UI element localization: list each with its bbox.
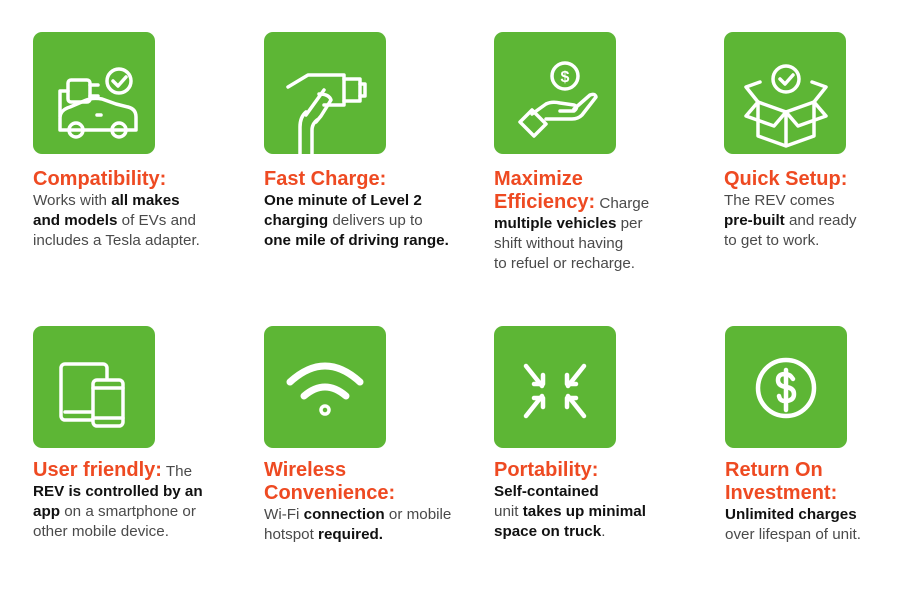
icon: wifi xyxy=(264,326,386,448)
text: fast charge: One minute of Level 2 xyxy=(264,192,422,209)
text: wireless convenience: Wireless xyxy=(264,459,346,481)
text: portability xyxy=(494,459,646,540)
text: maximize efficiency xyxy=(494,168,649,272)
text: quick setup: pre-built and ready xyxy=(724,212,857,229)
text: compatibility: Compatibility: xyxy=(33,168,166,190)
text: maximize efficiency: multiple vehicles per xyxy=(494,215,643,232)
text: user friendly: other mobile device. xyxy=(33,523,169,540)
icon: box with check xyxy=(724,32,846,154)
text: return on investment: Unlimited charges xyxy=(725,506,857,523)
icon: hand with coin xyxy=(494,32,616,154)
text: quick setup xyxy=(724,168,857,249)
text: wireless convenience xyxy=(264,459,451,543)
text: fast charge: one mile of driving range. xyxy=(264,232,449,249)
icon: car with plug xyxy=(33,32,155,154)
text: quick setup: The REV comes xyxy=(724,192,835,209)
text: user friendly xyxy=(33,459,203,540)
text: return on investment: over lifespan of unit. xyxy=(725,526,861,543)
text: portability: unit takes up minimal xyxy=(494,503,646,520)
icon: tablet and phone xyxy=(33,326,155,448)
text: user friendly: User friendly: The xyxy=(33,459,192,481)
icon: hand with coin: $ xyxy=(561,69,570,86)
text: compatibility: and models of EVs and xyxy=(33,212,196,229)
text: return on investment xyxy=(725,459,861,543)
text: wireless convenience: Convenience: xyxy=(264,482,395,504)
icon: dollar coin xyxy=(725,326,847,448)
text: fast charge: charging delivers up to xyxy=(264,212,423,229)
icon: charger in hand xyxy=(264,32,386,154)
text: compatibility: Works with all makes xyxy=(33,192,180,209)
text: maximize efficiency: Efficiency: Charge xyxy=(494,191,649,213)
text: return on investment: Return On xyxy=(725,459,823,481)
text: maximize efficiency: to refuel or recharge. xyxy=(494,255,635,272)
text: portability: Portability: xyxy=(494,459,598,481)
text: quick setup: to get to work. xyxy=(724,232,819,249)
text: compatibility: includes a Tesla adapter. xyxy=(33,232,200,249)
text: quick setup: Quick Setup: xyxy=(724,168,847,190)
text: fast charge xyxy=(264,168,449,249)
text: fast charge: Fast Charge: xyxy=(264,168,386,190)
text: wireless convenience: hotspot required. xyxy=(264,526,383,543)
text: portability: space on truck. xyxy=(494,523,605,540)
text: user friendly: app on a smartphone or xyxy=(33,503,196,520)
text: user friendly: REV is controlled by an xyxy=(33,483,203,500)
text: portability: Self-contained xyxy=(494,483,599,500)
text: return on investment: Investment: xyxy=(725,482,837,504)
text: compatibility xyxy=(33,168,200,249)
icon: arrows inward xyxy=(494,326,616,448)
text: maximize efficiency: Maximize xyxy=(494,168,583,190)
text: wireless convenience: Wi-Fi connection or mobile xyxy=(264,506,451,523)
text: maximize efficiency: shift without having xyxy=(494,235,623,252)
